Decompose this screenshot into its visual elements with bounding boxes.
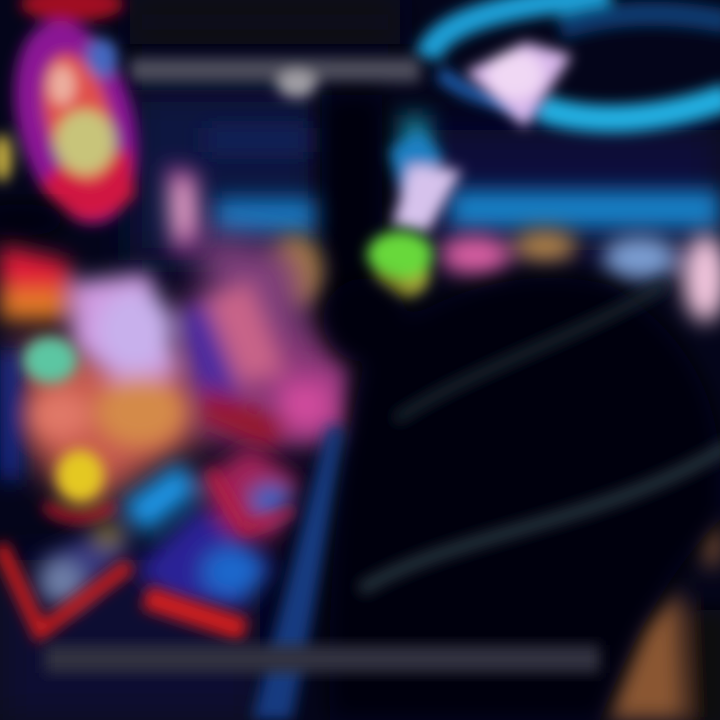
lilac slanted highlight xyxy=(390,130,462,232)
yellow circle xyxy=(45,450,115,518)
dark phone edge xyxy=(322,95,382,335)
red outlines lower left xyxy=(0,470,295,632)
skin tone bottom right xyxy=(605,521,720,720)
pink diamond xyxy=(465,42,572,128)
top left ring xyxy=(0,0,157,237)
top gray band xyxy=(130,58,420,98)
lower left phone panels xyxy=(38,445,300,610)
gray hair strands xyxy=(360,285,720,590)
bottom gray band xyxy=(45,645,600,673)
cyan arcs top right xyxy=(428,0,720,119)
left screen colourful mass xyxy=(20,230,340,510)
green blob xyxy=(367,231,433,299)
blue mid bands xyxy=(205,115,720,234)
left dark shadow xyxy=(0,204,65,236)
black head silhouette xyxy=(323,278,720,720)
slanted blue phone edge xyxy=(252,425,350,720)
teal circle xyxy=(23,337,77,383)
row of coloured tiles xyxy=(269,230,720,322)
